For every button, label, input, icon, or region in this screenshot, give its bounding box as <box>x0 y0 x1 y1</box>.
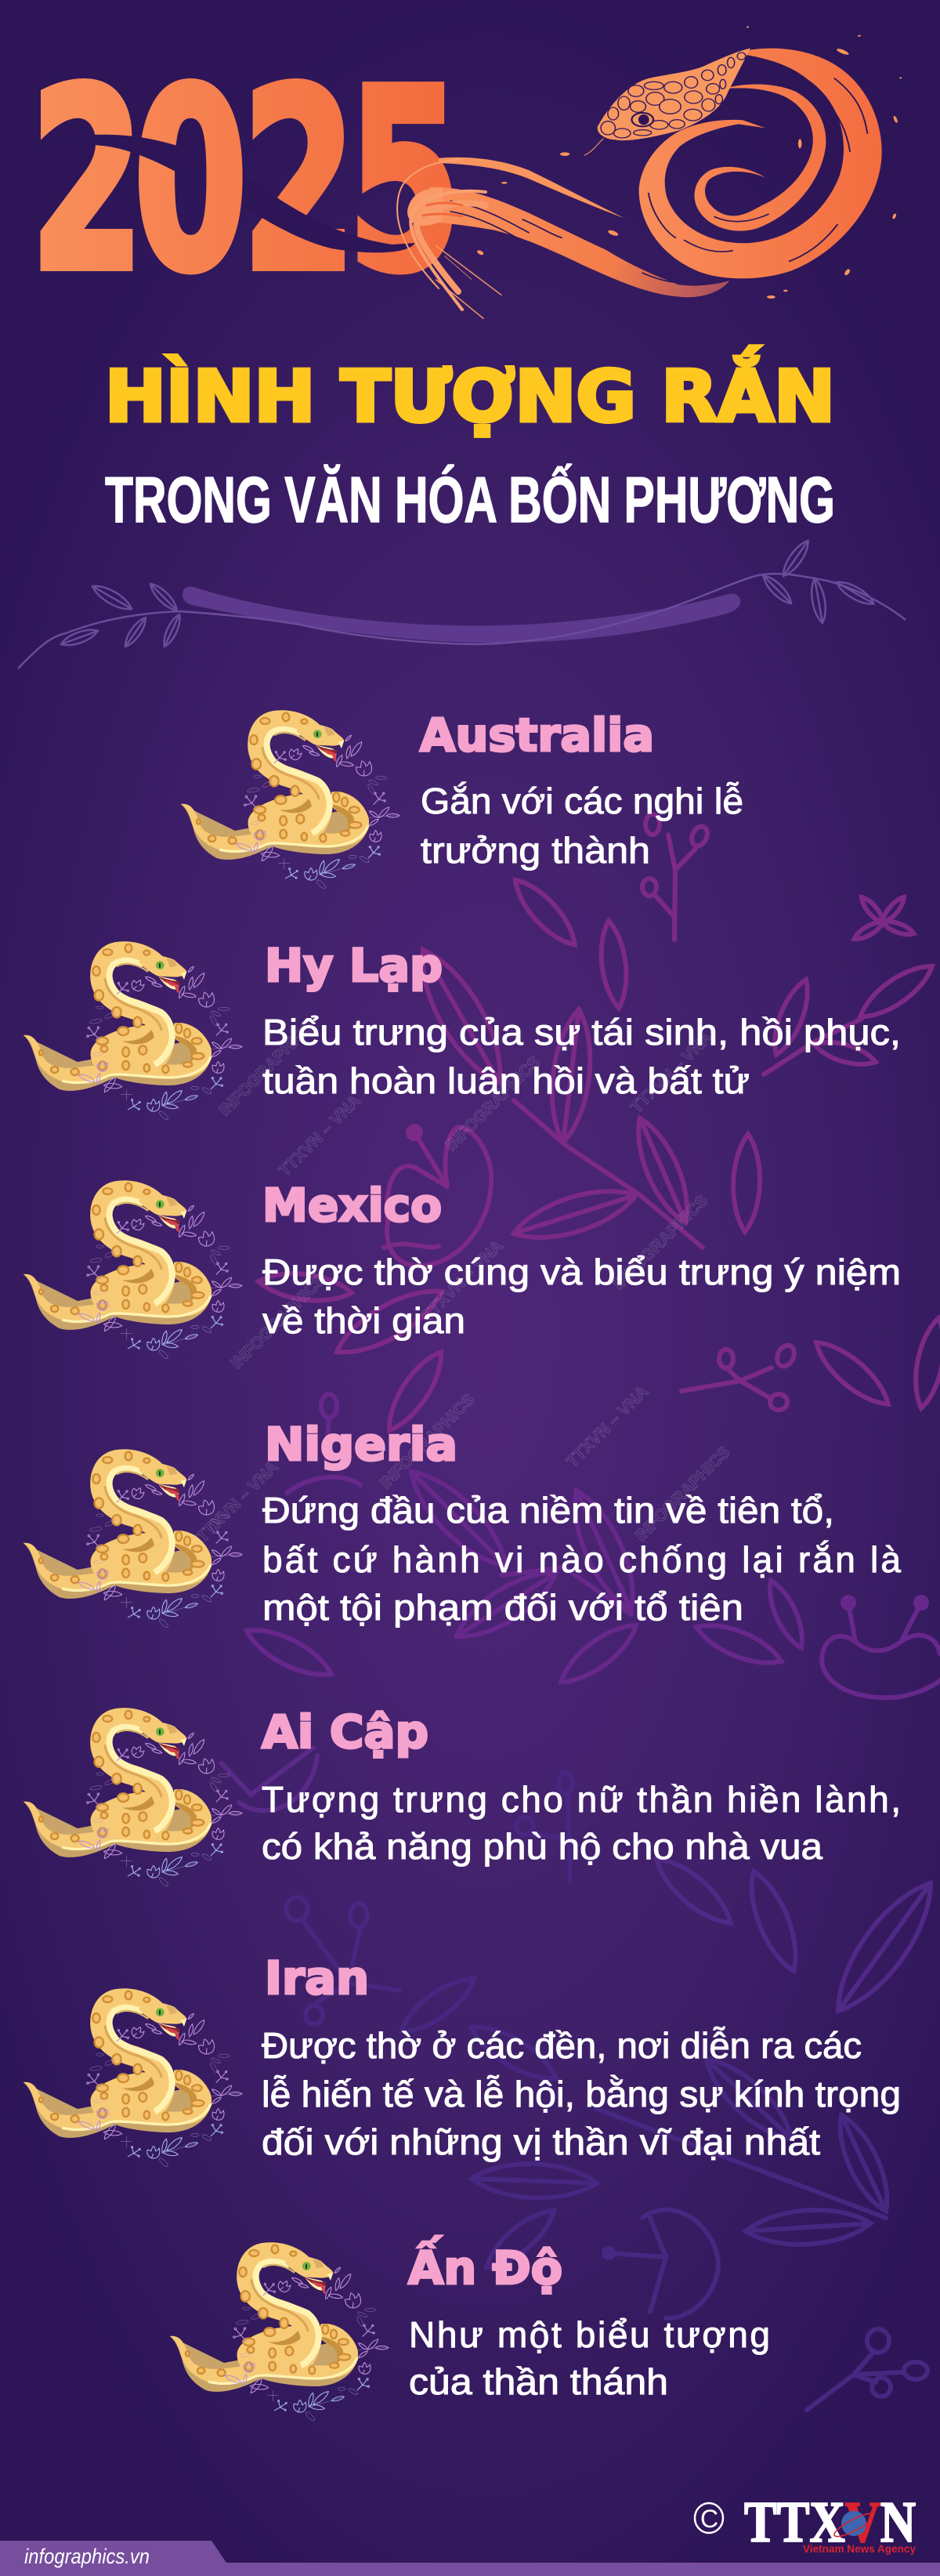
watermarks: TTXVN – VNA <box>627 1028 716 1117</box>
text: Iran <box>262 2025 901 2162</box>
icon: snake Iran <box>24 1991 242 2168</box>
footer band <box>0 2541 940 2576</box>
text: Nigeria: bất cứ hành vi nào chống lại rắn là <box>262 1539 901 1580</box>
text: Australia <box>421 781 743 871</box>
text: Iran: lễ hiến tế và lễ hội, bằng sự kính trọng <box>262 2074 901 2114</box>
text: Mexico: Được thờ cúng và biểu trưng ý niệm <box>262 1252 901 1292</box>
heading: Iran: Iran <box>265 1951 369 2005</box>
heading: Ai Cập: Ai Cập <box>262 1705 428 1759</box>
watermarks: INFOGRAPHICS <box>442 1053 544 1154</box>
watermarks: INFOGRAPHICS <box>215 1017 317 1119</box>
text: Australia: trưởng thành <box>421 830 650 871</box>
text: Hy Lạp: Biểu trưng của sự tái sinh, hồi phục, <box>262 1012 901 1053</box>
text: Nigeria: một tội phạm đối với tổ tiên <box>262 1587 743 1628</box>
icon: snake Ấn Độ <box>170 2245 389 2422</box>
heading: Australia: Australia <box>420 708 654 762</box>
icon: snake Ai Cập <box>24 1711 242 1887</box>
item: Mexico <box>24 1179 901 1360</box>
icon: snake Australia <box>181 713 400 889</box>
text: Hy Lạp: tuần hoàn luân hồi và bất tử <box>262 1060 750 1101</box>
icon: snake Hy Lạp <box>24 944 242 1121</box>
decorative brush divider with vines <box>18 538 906 668</box>
brush snake illustration <box>430 26 902 319</box>
watermarks: INFOGRAPHICS <box>227 1270 329 1372</box>
background floral pattern: lower faint <box>222 1748 940 2410</box>
item: Ấn Độ <box>170 2234 770 2422</box>
item: Australia <box>181 708 743 889</box>
watermarks: TTXVN – VNA <box>563 1382 652 1471</box>
brush strokes over the 5 <box>397 159 486 310</box>
watermarks: TTXVN – VNA <box>418 1237 507 1325</box>
text: Iran: đối với những vị thần vĩ đại nhất <box>262 2121 820 2162</box>
text: Mexico <box>262 1252 901 1341</box>
watermarks: INFOGRAPHICS <box>376 1390 478 1492</box>
item: Nigeria <box>24 1418 901 1629</box>
text: Nigeria <box>262 1490 901 1628</box>
text: Ai Cập: có khả năng phù hộ cho nhà vua <box>262 1826 822 1867</box>
text: Ấn Độ <box>409 2314 770 2402</box>
copyright logo TTXVN: TTXVN <box>744 2491 916 2555</box>
copyright logo TTXVN: C <box>700 2505 718 2533</box>
watermarks: TTXVN – VNA <box>193 1458 282 1546</box>
icon: snake Nigeria <box>24 1452 242 1629</box>
watermarks <box>193 1017 733 1546</box>
heading: Ấn Độ: Ấn Độ <box>408 2234 562 2295</box>
text: Nigeria: Đứng đầu của niềm tin về tiên tổ, <box>262 1490 834 1531</box>
item: Hy Lạp <box>24 939 901 1121</box>
text: Hy Lạp <box>262 1012 901 1101</box>
year 2025: 2025 <box>30 36 462 327</box>
heading: Hy Lạp: Hy Lạp <box>265 939 443 992</box>
heading: Mexico: Mexico <box>262 1179 442 1232</box>
text: Ai Cập <box>262 1779 901 1867</box>
watermarks: INFOGRAPHICS <box>631 1443 733 1545</box>
title: HÌNH TƯỢNG RẮN <box>105 346 835 438</box>
item: Ai Cập <box>24 1705 901 1887</box>
watermarks: INFOGRAPHICS <box>609 1191 711 1293</box>
text: Ấn Độ: của thần thánh <box>409 2361 668 2402</box>
background floral pattern: middle purple <box>241 1394 940 1697</box>
item: Iran <box>24 1951 901 2168</box>
icon: snake Mexico <box>24 1183 242 1360</box>
heading: Nigeria: Nigeria <box>265 1418 457 1471</box>
text: Iran: Được thờ ở các đền, nơi diễn ra các <box>262 2025 862 2066</box>
text: Ai Cập: Tượng trưng cho nữ thần hiền lành, <box>262 1779 901 1820</box>
text: Ấn Độ: Như một biểu tượng <box>409 2314 770 2355</box>
copyright logo TTXVN: Vietnam News Agency <box>803 2542 916 2555</box>
background floral pattern: upper magenta <box>257 814 940 1437</box>
text: Mexico: về thời gian <box>262 1300 465 1341</box>
footer band: infographics.vn <box>24 2545 150 2568</box>
watermarks: TTXVN – VNA <box>276 1092 364 1180</box>
text: Australia: Gắn với các nghi lễ <box>421 781 743 821</box>
